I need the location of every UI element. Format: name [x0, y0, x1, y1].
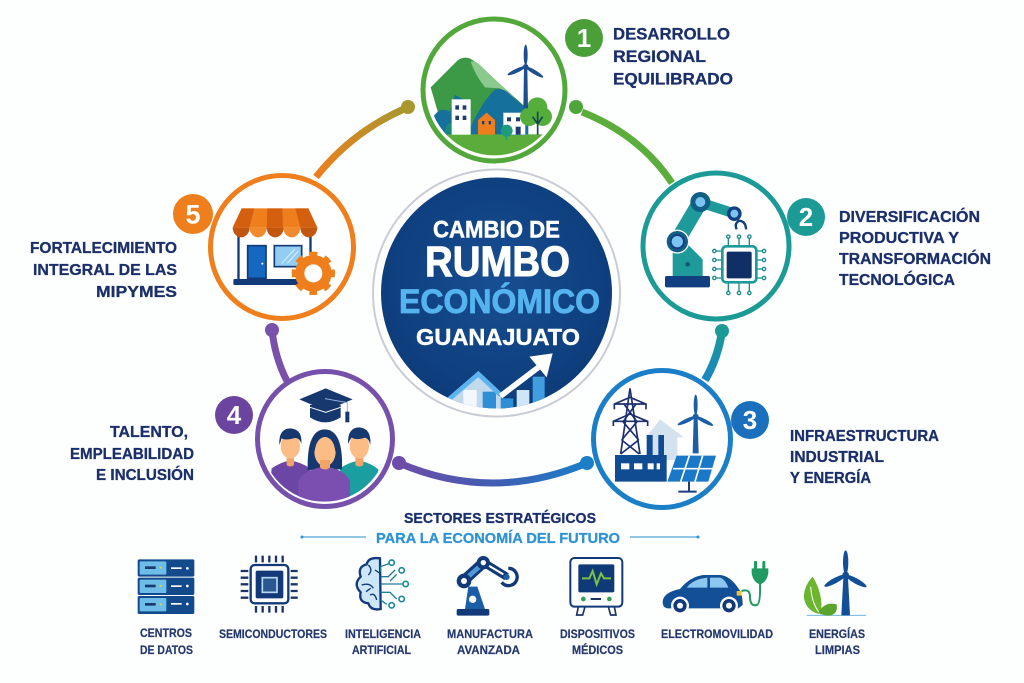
label 4: TALENTO, — [110, 424, 188, 441]
label 3: INDUSTRIAL — [790, 449, 884, 466]
badge 2: 2 — [799, 202, 813, 232]
badge 5 — [173, 194, 213, 234]
label 3: Y ENERGÍA — [790, 470, 871, 487]
connector: blue arc — [392, 456, 594, 483]
label 2: TECNOLÓGICA — [839, 271, 955, 289]
icon: pylon, factory, turbine, solar panel — [613, 388, 716, 492]
icon: wind turbine and leaves — [804, 550, 868, 616]
icon: industrial robot arm — [457, 556, 517, 616]
icon: electric car with plug — [663, 561, 768, 615]
icon: server rack — [138, 559, 194, 614]
sector: semiconductores: SEMICONDUCTORES — [219, 629, 327, 641]
label 2: PRODUCTIVA Y — [839, 230, 960, 247]
badge 4 — [215, 396, 253, 434]
sector: centros de datos: DE DATOS — [140, 645, 193, 657]
panel 5: mipymes — [210, 176, 354, 318]
heading: sectores estratégicos: PARA LA ECONOMÍA DEL FUTURO — [376, 530, 620, 547]
sector: semiconductores — [219, 556, 327, 641]
panel 1: desarrollo regional — [423, 19, 565, 161]
panel 4: talento — [258, 372, 392, 510]
badge 5: 5 — [185, 200, 201, 230]
sector: inteligencia artificial: INTELIGENCIA — [345, 629, 421, 641]
icon: storefront with gear — [233, 208, 332, 292]
sector: centros de datos: CENTROS — [140, 628, 192, 640]
icon: three people with graduation cap — [267, 388, 378, 510]
sector: inteligencia artificial — [345, 558, 421, 657]
sector: dispositivos médicos: MÉDICOS — [572, 644, 623, 657]
sector: manufactura avanzada: MANUFACTURA — [447, 629, 533, 641]
icon: brain with circuits — [357, 558, 408, 609]
sector: electromovilidad: ELECTROMOVILIDAD — [661, 629, 773, 641]
badge 2 — [787, 198, 825, 236]
label 5: MIPYMES — [96, 284, 177, 301]
panel 3: infraestructura — [594, 370, 730, 508]
sector: inteligencia artificial: ARTIFICIAL — [352, 645, 411, 657]
center title text: RUMBO — [425, 238, 570, 286]
center title text: GUANAJUATO — [416, 324, 580, 350]
label 1: REGIONAL — [613, 47, 706, 66]
sector: manufactura avanzada — [447, 556, 533, 657]
center title text: ECONÓMICO — [399, 283, 600, 321]
label 2 — [839, 208, 991, 289]
sector: dispositivos médicos — [560, 558, 635, 657]
icon: robot arm and chip — [665, 192, 766, 295]
icon: medical monitor — [570, 558, 622, 615]
label 1: DESARROLLO — [613, 24, 730, 44]
label 2: DIVERSIFICACIÓN — [839, 208, 980, 226]
connector: orange arc — [316, 100, 415, 177]
sector: energías limpias: LIMPIAS — [815, 645, 860, 657]
center title text — [399, 216, 600, 350]
sector: electromovilidad — [661, 561, 773, 641]
panel 2: diversificación productiva — [643, 173, 789, 319]
heading: sectores estratégicos — [300, 510, 700, 547]
label 4 — [70, 424, 194, 484]
center title text: CAMBIO DE — [433, 216, 560, 244]
chart with rising arrow — [448, 353, 553, 408]
label 3 — [790, 428, 939, 487]
label 5: FORTALECIMIENTO — [30, 240, 177, 257]
badge 1 — [565, 19, 603, 57]
label 5 — [30, 240, 177, 301]
badge 1: 1 — [577, 23, 591, 53]
sector: manufactura avanzada: AVANZADA — [457, 645, 520, 657]
label 2: TRANSFORMACIÓN — [839, 250, 991, 268]
label 4: E INCLUSIÓN — [96, 466, 194, 484]
label 4: EMPLEABILIDAD — [70, 446, 194, 463]
sector: energías limpias — [804, 550, 868, 657]
heading: sectores estratégicos: SECTORES ESTRATÉGICOS — [404, 510, 596, 527]
connector: teal arc — [705, 324, 729, 380]
label 1 — [613, 24, 733, 88]
connector: green arc — [569, 100, 672, 183]
label 1: EQUILIBRADO — [613, 70, 733, 88]
icon: microchip — [241, 556, 298, 613]
label 3: INFRAESTRUCTURA — [790, 428, 939, 445]
badge 3 — [731, 401, 769, 439]
sector: centros de datos — [138, 559, 194, 657]
sector: dispositivos médicos: DISPOSITIVOS — [560, 629, 635, 641]
icon: landscape with buildings and wind turbine — [430, 44, 552, 156]
badge 4: 4 — [227, 400, 242, 430]
label 5: INTEGRAL DE LAS — [33, 262, 177, 279]
sector: energías limpias: ENERGÍAS — [809, 628, 865, 641]
central badge — [373, 170, 620, 422]
connector: purple arc — [265, 323, 287, 381]
badge 3: 3 — [743, 405, 757, 435]
